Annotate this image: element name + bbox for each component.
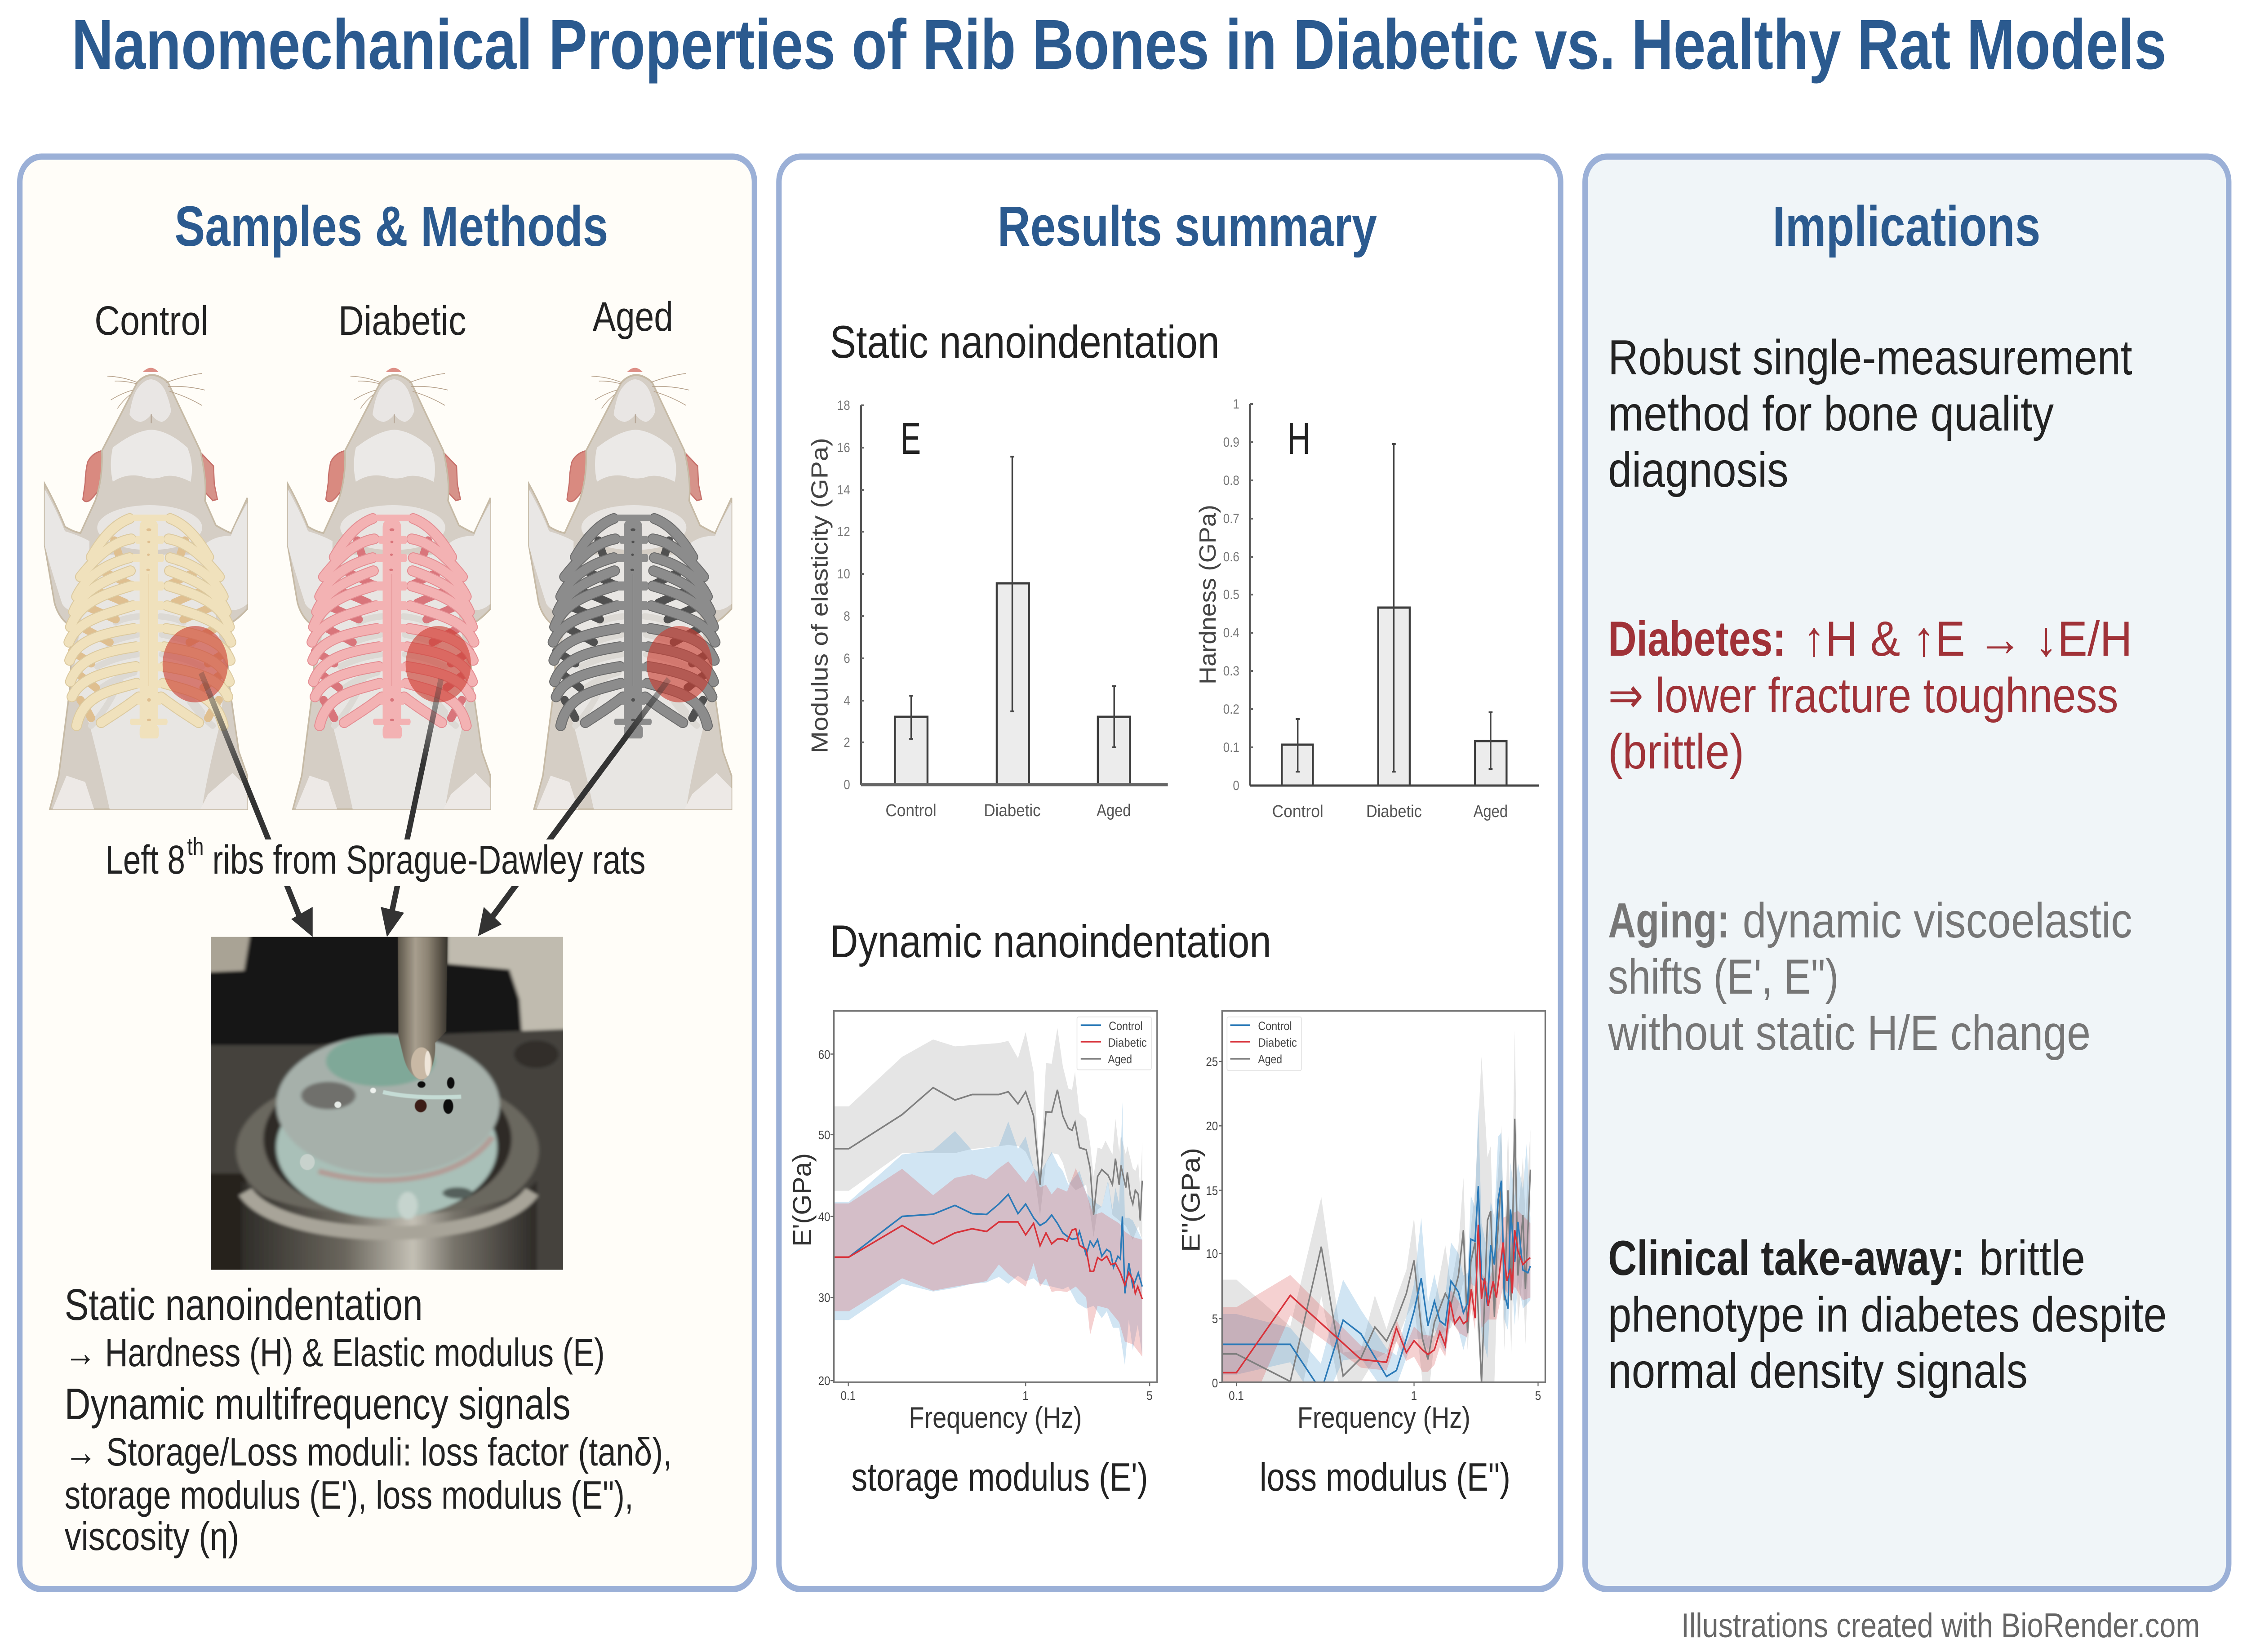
text block: clinical take-away <box>1608 1230 2167 1399</box>
line chart: storage modulus vs frequency: 0.1 <box>840 1388 856 1403</box>
text block: dynamic multifrequency signals: → Storage/Loss moduli: loss factor (tanδ), <box>65 1430 672 1474</box>
bar chart: modulus of elasticity <box>806 398 1168 820</box>
line chart: loss modulus vs frequency: 1 <box>1411 1388 1417 1403</box>
text block: diabetes finding: ⇒ lower fracture toughness <box>1608 668 2118 723</box>
line chart: storage modulus vs frequency: 5 <box>1146 1388 1153 1403</box>
text block: aging finding: shifts (E', E") <box>1608 949 1838 1004</box>
line chart: loss modulus vs frequency: E''(GPa) <box>1177 1148 1206 1252</box>
line chart: storage modulus vs frequency: E'(GPa) <box>788 1153 817 1247</box>
highlight: aged left 8th rib region <box>647 626 712 702</box>
bar chart: modulus of elasticity: 8 <box>844 608 850 623</box>
title: Nanomechanical Properties of Rib Bones in Diabetic vs. Healthy Rat Models <box>71 5 2167 84</box>
illustration: aged rat with ribcage <box>529 368 732 809</box>
heading: samples and methods: Samples & Methods <box>175 195 608 258</box>
text block: static nanoindentation method <box>65 1280 605 1375</box>
heading: results summary: Results summary <box>998 195 1377 258</box>
line chart: loss modulus vs frequency: 25 <box>1206 1054 1218 1069</box>
line chart: storage modulus vs frequency: 50 <box>818 1128 830 1142</box>
text block: clinical take-away: normal density signals <box>1608 1343 2028 1399</box>
chart letter: H: H <box>1287 413 1310 463</box>
text block: aging finding <box>1608 893 2132 1061</box>
heading: implications: Implications <box>1772 195 2040 258</box>
panel: samples and methods <box>20 156 755 1589</box>
text block: clinical take-away: Clinical take-away: <box>1608 1230 1965 1286</box>
text block: diabetes finding <box>1608 611 2132 779</box>
bar chart: modulus of elasticity: 14 <box>837 482 850 497</box>
text block: robust method: diagnosis <box>1608 442 1789 497</box>
line chart: loss modulus vs frequency <box>1177 1011 1545 1434</box>
line chart: loss modulus vs frequency: 0 <box>1212 1376 1218 1390</box>
text block: robust method <box>1608 330 2132 497</box>
footer credit: Illustrations created with BioRender.com <box>1681 1607 2200 1645</box>
line chart: storage modulus vs frequency <box>788 1011 1157 1434</box>
text block: robust method: method for bone quality <box>1608 386 2054 441</box>
chart letter: E: E <box>901 413 921 463</box>
bar chart: modulus of elasticity: 0 <box>844 777 850 792</box>
legend: loss chart: Control <box>1258 1019 1292 1033</box>
text block: static nanoindentation method: → Hardness (H) & Elastic modulus (E) <box>65 1331 605 1375</box>
highlight: control left 8th rib region <box>163 626 228 702</box>
arrow: aged rib to indenter <box>478 679 669 936</box>
subheading: dynamic nanoindentation: Dynamic nanoindentation <box>830 916 1271 967</box>
caption: left 8th ribs: th <box>187 833 204 860</box>
caption: left 8th ribs <box>97 833 661 886</box>
text block: clinical take-away: brittle <box>1979 1230 2085 1286</box>
bar chart: hardness: 0.9 <box>1223 435 1239 449</box>
illustration: diabetic rat with ribcage <box>288 368 490 809</box>
text block: aging finding: without static H/E change <box>1608 1005 2091 1061</box>
bar chart: modulus of elasticity: 10 <box>837 566 850 581</box>
legend: loss chart: Aged <box>1258 1052 1282 1066</box>
line chart: loss modulus vs frequency: 5 <box>1535 1388 1541 1403</box>
bar chart: hardness: 0.6 <box>1223 549 1239 564</box>
subheading: static nanoindentation: Static nanoindentation <box>830 317 1220 368</box>
text block: clinical take-away: phenotype in diabetes despite <box>1608 1287 2167 1342</box>
photo: nanoindenter tip over embedded rib sample <box>207 933 569 1275</box>
line chart: loss modulus vs frequency: 15 <box>1206 1183 1218 1198</box>
line chart: storage modulus vs frequency: 1 <box>1022 1388 1029 1403</box>
bar chart: hardness: 0.5 <box>1223 587 1239 602</box>
bar chart: hardness: 1 <box>1233 396 1239 411</box>
bar chart: hardness: Control <box>1272 802 1323 821</box>
bar chart: hardness: 0.3 <box>1223 663 1239 678</box>
text block: aging finding: Aging: <box>1608 893 1730 948</box>
text block: robust method: Robust single-measurement <box>1608 330 2132 385</box>
panel: results summary <box>779 156 1561 1589</box>
bar chart: hardness: Aged <box>1474 802 1508 821</box>
bar chart: hardness: 0.1 <box>1223 740 1239 755</box>
arrow: diabetic rib to indenter <box>381 679 441 937</box>
caption: storage modulus: storage modulus (E') <box>851 1456 1148 1499</box>
bar chart: hardness <box>1195 396 1539 821</box>
text block: static nanoindentation method: Static nanoindentation <box>65 1280 423 1329</box>
bar chart: modulus of elasticity: Modulus of elasticity (GPa) <box>806 438 833 753</box>
legend: storage chart: Diabetic <box>1108 1036 1147 1049</box>
line chart: storage modulus vs frequency: 20 <box>818 1373 830 1388</box>
bar chart: hardness: 0 <box>1233 778 1239 793</box>
bar chart: modulus of elasticity: 16 <box>837 440 850 455</box>
bar chart: modulus of elasticity: 4 <box>844 693 850 708</box>
bar chart: hardness: Hardness (GPa) <box>1195 505 1221 684</box>
group label: diabetic: Diabetic <box>338 298 466 344</box>
bar chart: modulus of elasticity: 12 <box>837 524 850 539</box>
legend: storage chart: Aged <box>1108 1052 1132 1066</box>
bar chart: hardness: 0.7 <box>1223 511 1239 526</box>
line chart: loss modulus vs frequency: Frequency (Hz) <box>1297 1401 1470 1434</box>
bar chart: hardness: 0.8 <box>1223 473 1239 488</box>
text block: aging finding: dynamic viscoelastic <box>1743 893 2132 948</box>
caption: loss modulus: loss modulus (E") <box>1260 1456 1510 1499</box>
bar chart: hardness: Diabetic <box>1366 802 1422 821</box>
arrow: control rib to indenter <box>201 673 313 937</box>
bar chart: modulus of elasticity: 2 <box>844 735 850 750</box>
text block: dynamic multifrequency signals: viscosity (η) <box>65 1515 239 1559</box>
caption: left 8th ribs: ribs from Sprague-Dawley rats <box>212 837 645 882</box>
bar chart: modulus of elasticity: 18 <box>837 398 850 413</box>
line chart: storage modulus vs frequency: 60 <box>818 1047 830 1061</box>
text block: diabetes finding: Diabetes: <box>1608 611 1786 666</box>
text block: dynamic multifrequency signals: storage modulus (E'), loss modulus (E"), <box>65 1474 634 1517</box>
text block: diabetes finding: ↑H & ↑E → ↓E/H <box>1803 611 2132 666</box>
legend: storage chart <box>1108 1019 1147 1066</box>
caption: left 8th ribs: Left 8 <box>106 837 185 882</box>
text block: dynamic multifrequency signals <box>65 1380 672 1559</box>
highlight: diabetic left 8th rib region <box>406 626 471 702</box>
line chart: loss modulus vs frequency: 5 <box>1212 1311 1218 1326</box>
bar chart: modulus of elasticity: 6 <box>844 651 850 666</box>
legend: loss chart <box>1258 1019 1297 1066</box>
legend: loss chart: Diabetic <box>1258 1036 1297 1049</box>
group label: control: Control <box>94 298 209 344</box>
legend: storage chart: Control <box>1109 1019 1142 1033</box>
line chart: loss modulus vs frequency: 10 <box>1206 1246 1218 1261</box>
bar chart: modulus of elasticity: Aged <box>1097 801 1131 820</box>
line chart: storage modulus vs frequency: Frequency (Hz) <box>909 1401 1082 1434</box>
line chart: loss modulus vs frequency: 0.1 <box>1229 1388 1244 1403</box>
panel: implications <box>1585 156 2229 1589</box>
bar chart: modulus of elasticity: Control <box>885 801 937 820</box>
bar chart: hardness: 0.4 <box>1223 625 1239 640</box>
text block: dynamic multifrequency signals: Dynamic multifrequency signals <box>65 1380 570 1429</box>
bar chart: hardness: 0.2 <box>1223 702 1239 716</box>
line chart: storage modulus vs frequency: 30 <box>818 1290 830 1305</box>
bar chart: modulus of elasticity: Diabetic <box>984 801 1041 820</box>
illustration: control rat with ribcage <box>45 368 247 809</box>
line chart: storage modulus vs frequency: 40 <box>818 1209 830 1224</box>
group label: aged: Aged <box>593 294 673 340</box>
line chart: loss modulus vs frequency: 20 <box>1206 1119 1218 1133</box>
text block: diabetes finding: (brittle) <box>1608 724 1744 779</box>
